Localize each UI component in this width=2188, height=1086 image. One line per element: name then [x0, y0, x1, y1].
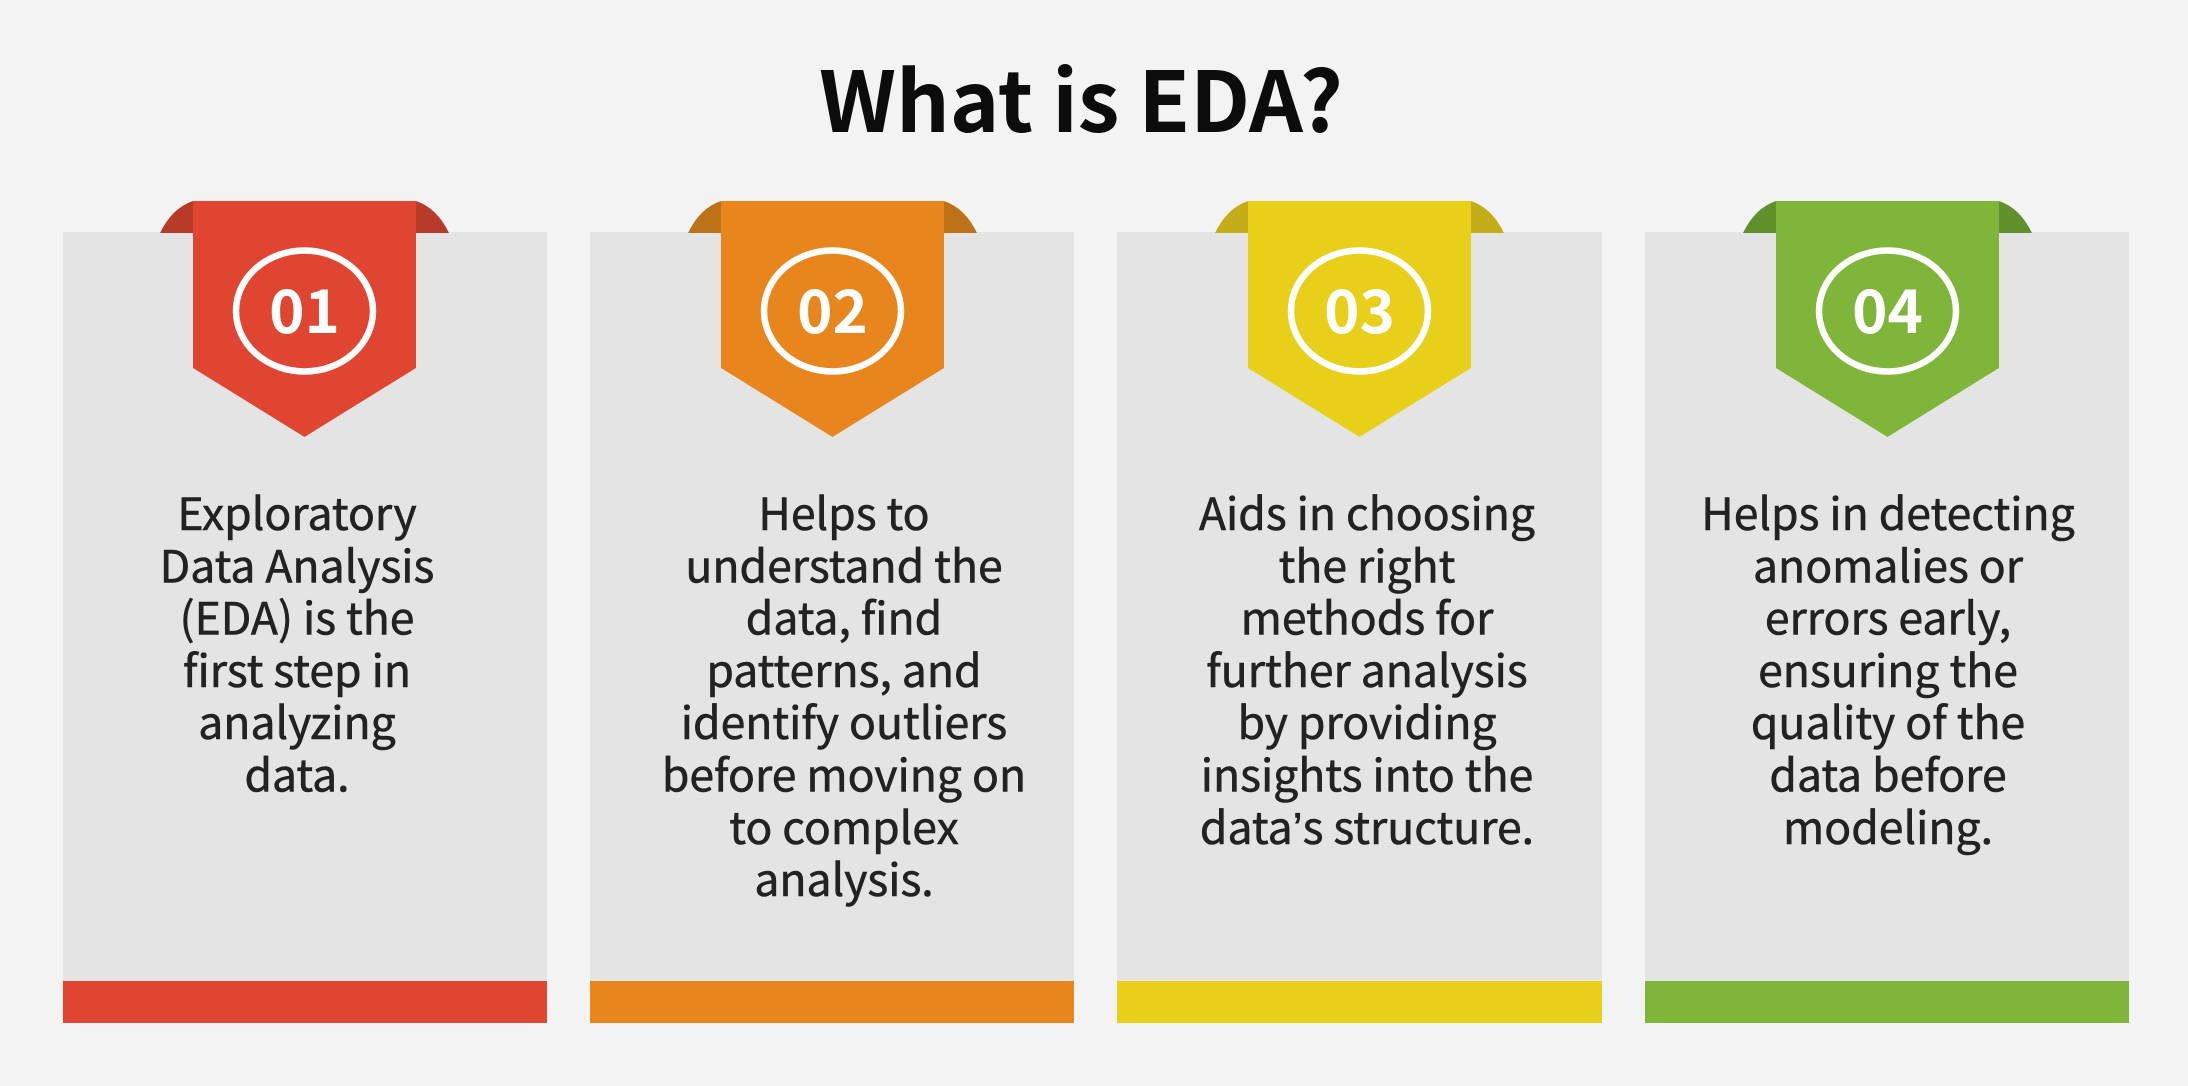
text block: card 03: the right: [1279, 530, 1456, 595]
icon: ribbon 02: [688, 201, 977, 437]
text block: card 02: understand the: [685, 530, 1003, 595]
text block: card 01: [160, 478, 434, 804]
text block: card 04: data before: [1769, 740, 2007, 804]
panel: card 01: [63, 201, 547, 1023]
text block: card 04: quality of the: [1751, 687, 2025, 752]
accent bar: card 04: [1645, 981, 2129, 1023]
text block: card 01: (EDA) is the: [180, 583, 414, 648]
text block: card 02: data, find: [746, 583, 942, 648]
text block: card 02: to complex: [729, 792, 959, 857]
text block: card 01: Data Analysis: [160, 530, 434, 595]
accent bar: card 03: [1117, 981, 1602, 1023]
accent bar: card 02: [590, 981, 1074, 1023]
text block: card 02: identify outliers: [681, 687, 1007, 752]
text block: card 02: before moving on: [662, 740, 1026, 804]
text block: card 04: [1701, 478, 2075, 857]
text block: card 04: modeling.: [1783, 792, 1993, 857]
text block: card 03: [1199, 478, 1535, 857]
text block: card 04: ensuring the: [1758, 635, 2018, 700]
panel: card 04: [1645, 201, 2129, 1023]
text block: card 02: Helps to: [758, 478, 930, 543]
icon: ribbon 03: 03: [1324, 264, 1395, 351]
panel: card 02: [590, 201, 1074, 1023]
text block: card 01: Exploratory: [177, 478, 417, 543]
text block: card 04: Helps in detecting: [1701, 478, 2075, 543]
text block: card 01: data.: [244, 740, 350, 804]
text block: card 02: [662, 478, 1026, 909]
text block: card 03: methods for: [1241, 583, 1494, 648]
text block: card 03: by providing: [1237, 687, 1497, 752]
text block: card 01: first step in: [183, 635, 411, 700]
text block: card 03: data’s structure.: [1200, 792, 1534, 857]
panel: card 03: [1117, 201, 1602, 1023]
icon: ribbon 04: 04: [1852, 264, 1923, 351]
icon: ribbon 02: 02: [797, 264, 868, 351]
text block: card 03: Aids in choosing: [1199, 478, 1535, 543]
text block: card 02: patterns, and: [706, 635, 982, 700]
title: What is EDA?: [819, 36, 1343, 157]
icon: ribbon 03: [1215, 201, 1504, 437]
text block: card 02: analysis.: [754, 844, 934, 909]
text block: card 01: analyzing: [198, 687, 396, 752]
text block: card 04: anomalies or: [1753, 530, 2024, 595]
icon: ribbon 04: [1743, 201, 2032, 437]
icon: ribbon 01: 01: [269, 264, 340, 351]
accent bar: card 01: [63, 981, 547, 1023]
text block: card 03: further analysis: [1206, 635, 1528, 700]
text block: card 04: errors early,: [1765, 583, 2011, 648]
icon: ribbon 01: [160, 201, 449, 437]
text block: card 03: insights into the: [1201, 740, 1533, 804]
